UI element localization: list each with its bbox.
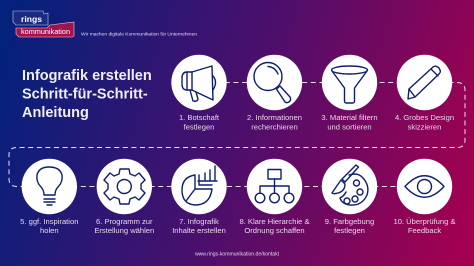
step 7: Infografik Inhalte erstellen xyxy=(171,159,227,235)
step 5: ggf. Inspiration holen xyxy=(20,159,78,235)
step 7: Infografik Inhalte erstellen: 7. Infografik xyxy=(179,217,219,226)
icon: light bulb xyxy=(37,167,62,205)
step 9: Farbgebung festlegen: festlegen xyxy=(334,226,365,235)
icon: funnel xyxy=(332,66,368,103)
step 8: Klare Hierarchie & Ordnung schaffen xyxy=(239,159,310,235)
title: Schritt-für-Schritt- xyxy=(22,86,148,102)
step 3: Material filtern und sortieren: 3. Material filtern xyxy=(321,113,378,122)
step 1: Botschaft festlegen: festlegen xyxy=(184,122,214,132)
footer url: www.rings-kommunikation.de/kontakt xyxy=(195,252,280,258)
icon: eye xyxy=(405,176,444,197)
step 6: Programm zur Erstellung wählen: 6. Programm zur xyxy=(96,217,153,226)
step 8: Klare Hierarchie & Ordnung schaffen: Ordnung schaffen xyxy=(244,226,305,235)
icon: megaphone xyxy=(182,66,216,101)
step 10: Überprüfung & Feedback: Feedback xyxy=(408,226,441,235)
title xyxy=(22,68,152,121)
step 10: Überprüfung & Feedback: 10. Überprüfung & xyxy=(393,217,456,226)
step 8: Klare Hierarchie & Ordnung schaffen: 8. Klare Hierarchie & xyxy=(239,217,310,226)
step 1: Botschaft festlegen: 1. Botschaft xyxy=(179,113,220,122)
step 7: Infografik Inhalte erstellen: Inhalte erstellen xyxy=(172,226,226,235)
title: Anleitung xyxy=(22,105,89,121)
step 9: Farbgebung festlegen xyxy=(322,159,377,235)
icon: magnifying glass xyxy=(254,62,291,103)
step 5: ggf. Inspiration holen: 5. ggf. Inspiration xyxy=(20,217,78,226)
step 4: Grobes Design skizzieren xyxy=(395,55,454,131)
step 2: Informationen recherchieren: 2. Informationen xyxy=(247,113,302,122)
step 3: Material filtern und sortieren xyxy=(321,55,378,131)
logo xyxy=(13,11,74,37)
icon: pencil xyxy=(408,66,440,99)
step 9: Farbgebung festlegen: 9. Farbgebung xyxy=(325,217,374,226)
title: Infografik erstellen xyxy=(22,68,152,84)
step 5: ggf. Inspiration holen: holen xyxy=(40,226,59,235)
icon: brush and palette xyxy=(332,165,368,205)
step 4: Grobes Design skizzieren: 4. Grobes Design xyxy=(395,113,454,122)
step 1: Botschaft festlegen xyxy=(171,55,227,131)
icon: gear xyxy=(104,169,145,204)
step 6: Programm zur Erstellung wählen xyxy=(94,159,154,235)
logo: kommunikation bubble: kommunikation xyxy=(21,27,70,36)
step 10: Überprüfung & Feedback xyxy=(393,159,456,235)
tagline: Wir machen digitale Kommunikation für Unternehmen xyxy=(81,31,197,37)
step 3: Material filtern und sortieren: und sortieren xyxy=(327,122,372,132)
icon: hierarchy chart xyxy=(255,170,294,203)
step 2: Informationen recherchieren xyxy=(247,55,302,131)
step 4: Grobes Design skizzieren: skizzieren xyxy=(408,122,441,132)
step 6: Programm zur Erstellung wählen: Erstellung wählen xyxy=(94,226,154,235)
logo: rings bubble: rings xyxy=(21,14,42,24)
dashed connector path xyxy=(9,82,465,186)
icon: pie and bar chart xyxy=(182,166,217,205)
step 2: Informationen recherchieren: recherchieren xyxy=(251,122,298,132)
